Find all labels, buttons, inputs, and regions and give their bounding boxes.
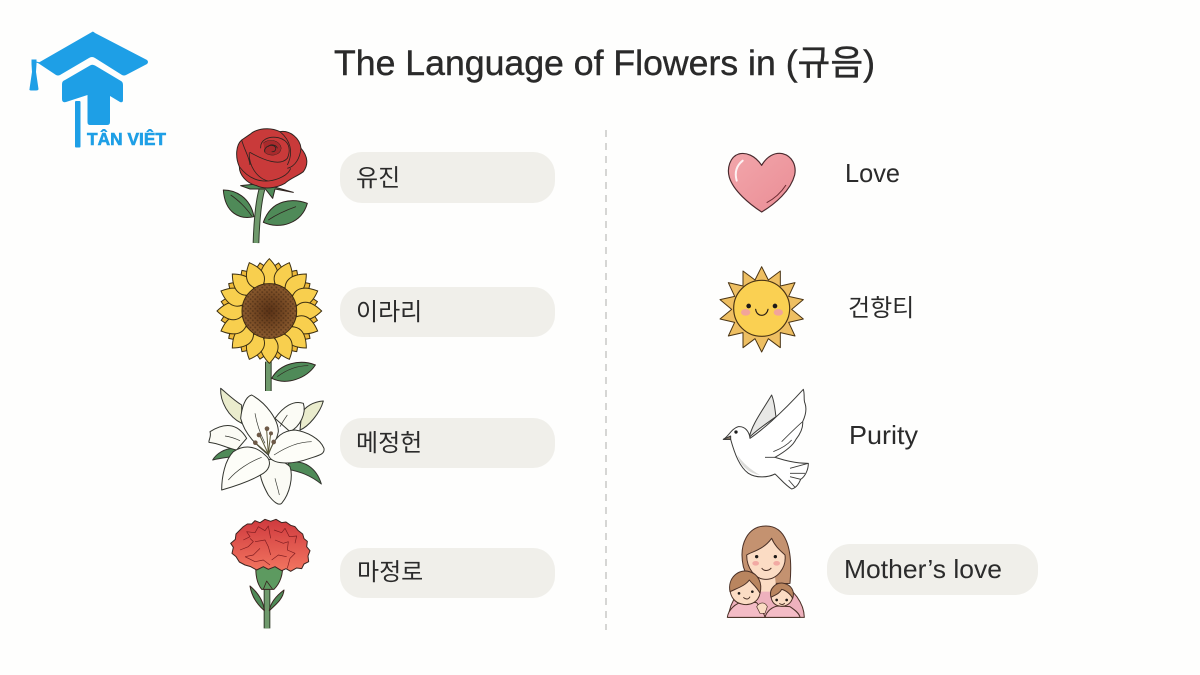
icon: smiling sun [720,267,803,352]
icon: mother and children [727,526,804,617]
label: 이라리 [340,287,555,337]
label: 이라리: 이라리 [356,299,422,326]
panel: flowers column [209,129,555,628]
logo arrow [62,65,123,125]
logo cap [38,32,148,76]
panel: meanings column [720,153,1038,617]
icon: red rose [223,129,307,243]
icon: white lily [209,388,324,504]
label: 메정헌 [340,418,555,468]
text: Purity: Purity [849,420,918,450]
label: Mother's love [827,544,1038,595]
logo tassel [30,60,40,90]
icon: red carnation [231,519,310,628]
label: 유진: 유진 [356,165,400,192]
logo bar [75,101,80,148]
logo wordmark: TÂN VIÊT [87,128,166,149]
center dashed divider [605,130,607,630]
label: 마정로: 마정로 [357,559,423,586]
label: Mother's love: Mother’s love [844,554,1002,584]
label: 유진 [340,152,555,203]
text: 건항티: 건항티 [848,295,914,322]
text: Love: Love [845,158,900,188]
label: 메정헌: 메정헌 [356,430,422,457]
label: 마정로 [340,548,555,598]
icon: sunflower [217,259,322,391]
icon: pink heart [728,153,795,212]
logo: Tân Việt [30,32,166,149]
title: The Language of Flowers in (규음) [334,44,875,83]
icon: white dove [723,389,808,489]
